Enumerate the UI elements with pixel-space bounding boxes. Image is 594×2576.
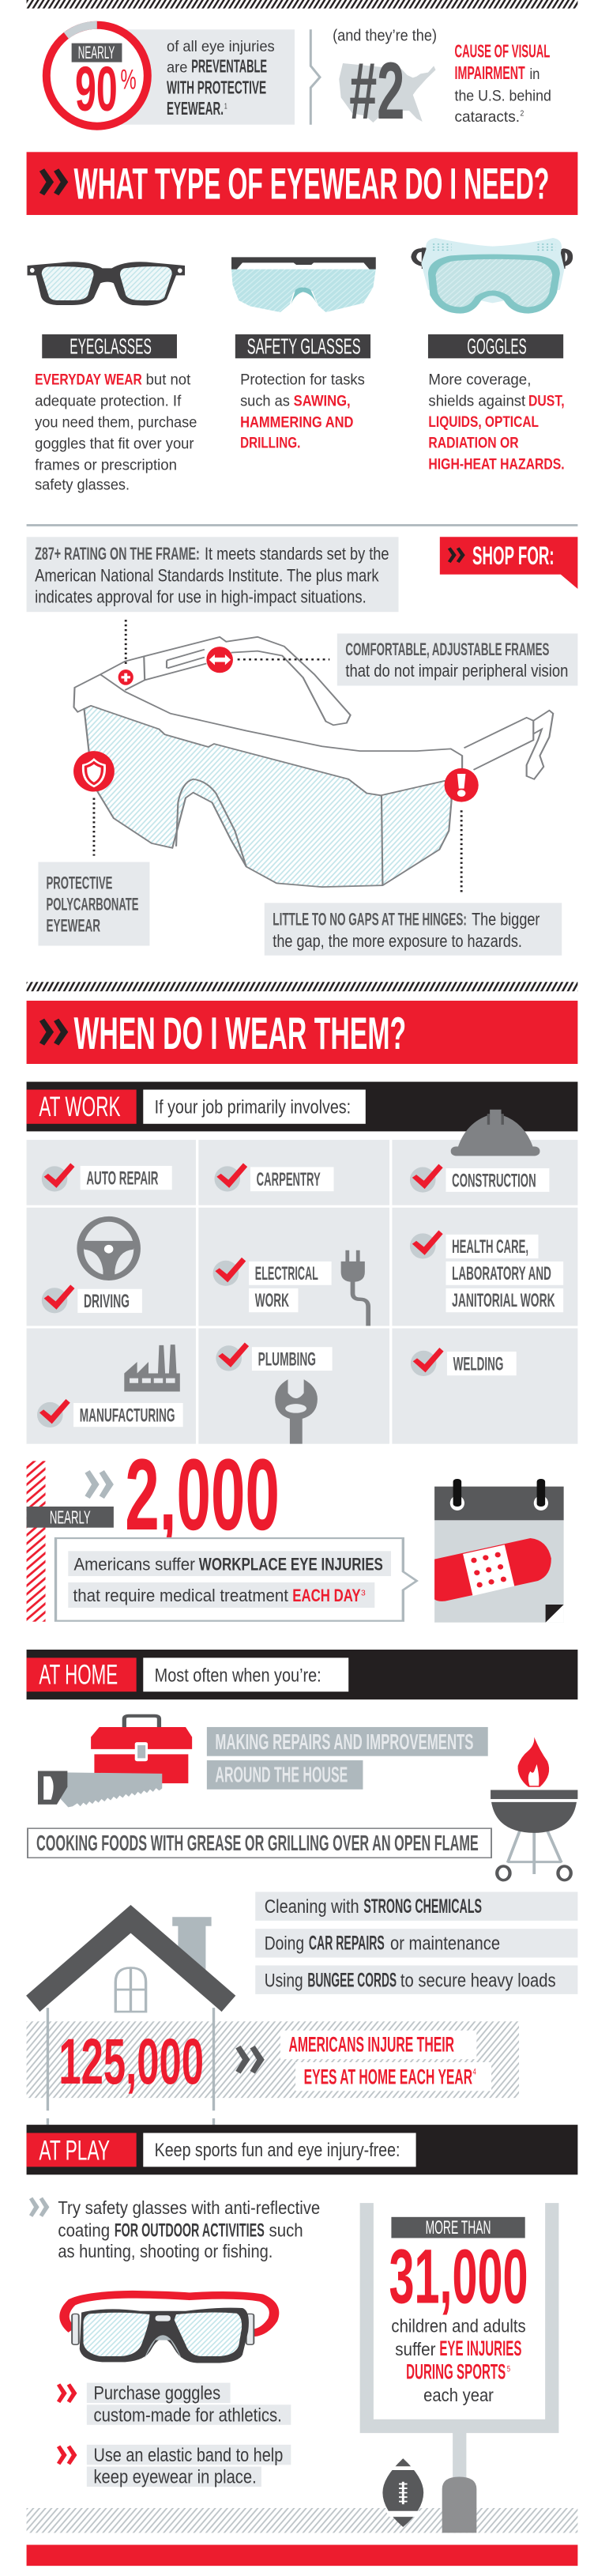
icon: steering wheel: [81, 1219, 137, 1278]
list: bungee cords: [255, 1966, 577, 1994]
panel: 2,000 workplace stat: [27, 1438, 564, 1623]
item: plumbing: [216, 1342, 333, 1371]
90 percent ring: [47, 25, 148, 126]
icon: plus mark: [118, 669, 133, 685]
tip: custom goggles: [57, 2382, 291, 2426]
text bars: making repairs: AROUND THE HOUSE: [215, 1762, 348, 1787]
red hatch strip: [27, 1461, 46, 1622]
text: eyeglasses description: you need them, purchase: [35, 414, 197, 431]
text: safety glasses description: DRILLING.: [240, 435, 300, 451]
panel: top statistics: [27, 0, 577, 136]
list: bungee cords: BUNGEE CORDS: [307, 1969, 397, 1991]
tip: elastic band: keep eyewear in place.: [93, 2466, 257, 2487]
text: eyeglasses description: but not: [146, 372, 190, 388]
text: goggles description: RADIATION OR: [428, 435, 519, 451]
icon: grill with flame: [491, 1737, 577, 1880]
dotted leader lines: [94, 620, 461, 895]
panel: when do I wear them, at work: [27, 982, 577, 1444]
banner: shop for: [440, 537, 577, 589]
icon: hard hat: [451, 1110, 539, 1156]
panel: when do I wear them, at work: ELECTRICAL: [255, 1262, 318, 1284]
text: sports injuries: 5: [507, 2363, 510, 2374]
icon: football: [382, 2458, 423, 2527]
text: sports injuries: children and adults: [391, 2316, 526, 2337]
list: car repairs: Doing: [265, 1933, 304, 1954]
text: goggles description: DUST,: [528, 392, 565, 409]
90 percent text group: 90: [75, 53, 118, 124]
list: strong chemicals: [255, 1892, 577, 1921]
icon: gray chevrons: [29, 2197, 49, 2217]
nearly badge: [72, 43, 122, 62]
grid of job cells: [27, 1140, 577, 1444]
item: auto repair: AUTO REPAIR: [86, 1167, 158, 1189]
callout: hinges: The bigger: [472, 910, 539, 930]
and they're the: (and they’re the): [333, 27, 437, 45]
list: car repairs: [255, 1929, 577, 1958]
text: goggles description: [428, 372, 565, 473]
number two stat: #2: [349, 45, 404, 136]
callout: adjustable frames: [337, 633, 577, 686]
text: goggles description: shields against: [428, 392, 525, 409]
text: safety glasses description: such as: [240, 392, 290, 409]
icon: calendar with bandage: [434, 1479, 564, 1623]
icon: saw: [38, 1771, 162, 1807]
stat description: of all eye injuries: [167, 38, 275, 55]
stat description: EYEWEAR.: [167, 99, 224, 119]
tip: custom goggles: Purchase goggles: [93, 2382, 220, 2403]
list: car repairs: or maintenance: [390, 1933, 500, 1954]
icon: eyeglasses: [28, 262, 185, 306]
callout: Z87 rating: It meets standards set by the: [205, 544, 389, 564]
item: electrical work: WORK: [255, 1289, 289, 1311]
list: strong chemicals: Cleaning with: [265, 1896, 359, 1917]
item: carpentry: [214, 1164, 334, 1192]
chevron divider: [310, 29, 320, 125]
text: eyeglasses description: goggles that fit over your: [35, 436, 194, 452]
illustration: safety glasses diagram: [74, 637, 553, 887]
callout: polycarbonate: [38, 862, 149, 945]
text: eyeglasses description: adequate protection. If: [35, 392, 182, 409]
bar: at work: If your job primarily involves:: [155, 1096, 351, 1118]
speech callout: 3: [361, 1588, 366, 1597]
panel: top statistics: WITH PROTECTIVE: [167, 77, 266, 97]
text: safety glasses outdoor: FOR OUTDOOR ACTIVITIES: [115, 2219, 265, 2241]
speech callout: Americans suffer: [74, 1554, 195, 1574]
text: eyeglasses description: safety glasses.: [35, 476, 130, 493]
number two stat: [333, 27, 551, 136]
house walls continuation: [47, 2118, 213, 2125]
bar: at home: [27, 1650, 577, 1699]
item: electrical work: [213, 1258, 332, 1312]
bar: at play: [27, 2125, 577, 2174]
badge: more than: [391, 2216, 525, 2238]
panel: at home: 125,000: [58, 2025, 204, 2097]
90 percent text group: [72, 38, 275, 124]
cause of visual impairment text: cataracts.: [455, 108, 520, 126]
bar: at home: AT HOME: [39, 1660, 118, 1691]
text: eyeglasses description: EVERYDAY WEAR: [35, 372, 142, 388]
stat description: [167, 38, 275, 119]
text: safety glasses description: HAMMERING AND: [240, 414, 353, 431]
text: safety glasses description: [240, 372, 365, 451]
callout: Z87 rating: Z87+ RATING ON THE FRAME:: [35, 544, 200, 564]
hatch band: [27, 2021, 519, 2098]
icon: adjustable arrows: [206, 647, 233, 673]
illustration: house: [26, 1905, 235, 2110]
callout: hinges: [265, 903, 562, 956]
bottom red band: [27, 2545, 577, 2566]
speech callout: [56, 1538, 417, 1621]
stat description: are: [167, 59, 187, 76]
icon: gray chevrons: [85, 1470, 114, 1499]
icon: shield: [73, 751, 115, 792]
stat box background: [97, 29, 295, 125]
callout: polycarbonate: POLYCARBONATE: [47, 895, 139, 915]
90 percent text group: NEARLY: [78, 43, 115, 62]
label: eyeglasses: EYEGLASSES: [70, 334, 152, 359]
bar: at work: [27, 1082, 577, 1131]
text: safety glasses description: Protection for tasks: [240, 372, 365, 388]
panel: eyewear types: SAFETY GLASSES: [247, 334, 361, 359]
panel: at home: [26, 1650, 577, 2110]
label: eyeglasses: [42, 334, 177, 359]
icon: double chevron: [39, 168, 68, 195]
panel: eyewear types: [28, 238, 570, 493]
panel: at play: [27, 2118, 577, 2566]
text: sports injuries: each year: [423, 2386, 494, 2405]
text: americans injure their eyes: 4: [473, 2066, 476, 2076]
text bars: making repairs: [207, 1727, 488, 1790]
item: plumbing: PLUMBING: [258, 1348, 316, 1370]
speech callout: EACH DAY: [292, 1586, 361, 1605]
tip: elastic band: Use an elastic band to help: [93, 2444, 283, 2465]
text: safety glasses outdoor: coating: [58, 2220, 110, 2241]
item: welding: WELDING: [453, 1352, 503, 1375]
item: health care: [410, 1230, 563, 1312]
panel: what to shop for: [27, 524, 577, 956]
icon: sports goggles: [65, 2295, 274, 2363]
text: americans injure their eyes: [280, 2031, 491, 2091]
label: goggles: [428, 334, 563, 359]
icon: plug: [341, 1250, 368, 1326]
text: sports injuries: suffer: [395, 2339, 436, 2359]
bar: at play: Keep sports fun and eye injury-free:: [155, 2139, 400, 2160]
callout: Z87 rating: indicates approval for use in high-impact situations.: [35, 587, 367, 607]
callout: Z87 rating: American National Standards Institute. The plus mark: [35, 566, 379, 586]
90 percent text group: %: [121, 65, 137, 96]
item: carpentry: CARPENTRY: [257, 1168, 321, 1190]
item: driving: DRIVING: [84, 1290, 130, 1311]
icon: exclamation: [445, 768, 479, 802]
callout: Z87 rating: [27, 537, 399, 612]
list: car repairs: CAR REPAIRS: [309, 1933, 385, 1955]
nearly badge: [27, 1507, 114, 1528]
text: sports injuries: [391, 2316, 526, 2405]
stat description: 1: [224, 101, 227, 111]
bar: at play: AT PLAY: [39, 2135, 110, 2166]
speech callout: WORKPLACE EYE INJURIES: [199, 1554, 383, 1574]
bar: at home: Most often when you’re:: [155, 1665, 321, 1686]
icon: safety glasses: [231, 257, 376, 312]
panel: top statistics: PREVENTABLE: [191, 56, 267, 76]
ground hatch: [27, 2508, 577, 2533]
item: manufacturing: [37, 1399, 183, 1428]
heading: what type of eyewear: [27, 152, 577, 215]
text: safety glasses description: SAWING,: [294, 392, 351, 409]
icon: toolbox: [91, 1716, 192, 1783]
text: goggles description: More coverage,: [428, 372, 531, 388]
panel: when do I wear them, at work: MANUFACTURING: [80, 1404, 175, 1426]
cause of visual impairment text: 2: [520, 109, 524, 118]
cause of visual impairment text: [455, 41, 551, 126]
callout: polycarbonate: EYEWEAR: [47, 916, 100, 936]
bar: at work: AT WORK: [39, 1092, 121, 1122]
speech callout: that require medical treatment: [73, 1586, 288, 1605]
icon: goggles: [414, 238, 570, 314]
icon: wrench: [275, 1379, 318, 1444]
text: safety glasses outdoor: as hunting, shooting or fishing.: [58, 2241, 273, 2261]
US map: [339, 63, 436, 123]
icon: factory: [124, 1345, 180, 1391]
top hatch strip: [27, 0, 577, 9]
icon: dark chevrons: [235, 2046, 265, 2074]
illustration: goal post: [360, 2203, 558, 2533]
nearly badge: NEARLY: [50, 1507, 91, 1528]
item: auto repair: [42, 1164, 172, 1192]
list: bungee cords: Using: [265, 1970, 303, 1991]
text: eyeglasses description: [35, 372, 197, 493]
text: safety glasses outdoor: such: [269, 2220, 303, 2241]
callout: polycarbonate: PROTECTIVE: [47, 873, 112, 893]
text: safety glasses outdoor: [58, 2197, 320, 2261]
item: welding: [411, 1348, 517, 1376]
panel: 2,000 workplace stat: 2,000: [125, 1438, 280, 1551]
badge: more than: MORE THAN: [426, 2216, 491, 2238]
tip: elastic band: [57, 2444, 291, 2487]
cause of visual impairment text: in: [529, 66, 539, 83]
text: eyeglasses description: frames or prescription: [35, 456, 177, 473]
item: driving: [42, 1284, 142, 1313]
tip: custom goggles: custom-made for athletics.: [93, 2404, 282, 2426]
text: safety glasses outdoor: Try safety glasses with anti-reflective: [58, 2197, 320, 2218]
label: safety glasses: [235, 334, 370, 359]
item: construction: [410, 1164, 549, 1193]
